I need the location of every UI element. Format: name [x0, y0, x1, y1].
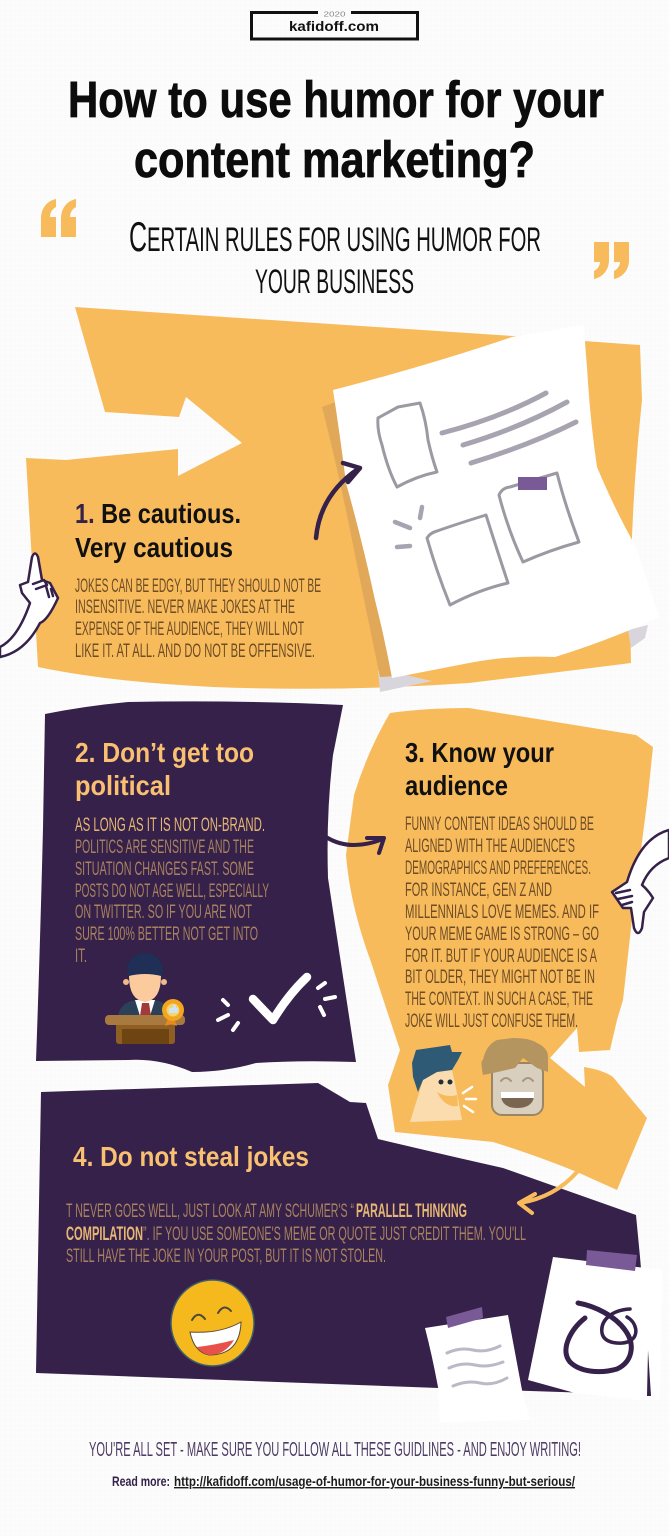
body text 3: FOR INSTANCE, GEN Z AND — [405, 879, 552, 901]
heading 4: 4. Do not steal jokes — [73, 1141, 309, 1172]
body text 2: POLITICS ARE SENSITIVE AND THE — [75, 836, 254, 858]
panel 3 background — [346, 708, 653, 1190]
icon: closing quote mark — [594, 242, 629, 279]
heading 1 — [75, 498, 241, 563]
icon: laughing emoji — [171, 1280, 254, 1366]
panel: rule 4 do not steal jokes — [36, 1083, 651, 1395]
body text 3 — [405, 813, 599, 1032]
subtitle: YOUR BUSINESS — [255, 263, 414, 301]
body text 1: JOKES CAN BE EDGY, BUT THEY SHOULD NOT BE — [75, 575, 321, 597]
logo badge: 2020 — [324, 12, 346, 18]
panel 1 background — [26, 307, 642, 689]
body text 4: PARALLEL THINKING — [356, 1200, 467, 1222]
icon: laughing face — [482, 1038, 548, 1115]
panel 2 background — [36, 701, 356, 1072]
heading 2: 2. Don’t get too — [75, 737, 254, 768]
paper sheet — [333, 325, 659, 678]
heading 3 — [405, 737, 554, 801]
panel: rule 2 don't get too political — [36, 701, 356, 1072]
body text 4: T NEVER GOES WELL, JUST LOOK AT AMY SCHUMER'S “ — [66, 1200, 354, 1222]
sketch frame 1 — [378, 403, 437, 487]
body text 2: POSTS DO NOT AGE WELL, ESPECIALLY — [75, 880, 269, 902]
sticky note with lines — [425, 1307, 530, 1422]
sketch frame 3 — [427, 515, 508, 605]
panel: rule 3 know your audience — [346, 708, 653, 1190]
body text 1: INSENSITIVE. NEVER MAKE JOKES AT THE — [75, 596, 295, 618]
scribble — [566, 1303, 636, 1372]
sketch text lines — [442, 393, 576, 463]
logo badge — [252, 12, 418, 39]
body text 1: EXPENSE OF THE AUDIENCE, THEY WILL NOT — [75, 618, 304, 640]
paper gray shadow right — [628, 625, 648, 648]
body text 2: AS LONG AS IT IS NOT ON-BRAND. — [75, 814, 265, 836]
icon: pointing hand down — [612, 830, 669, 933]
body text 4: COMPILATION — [66, 1223, 143, 1245]
icon: check mark with burst — [218, 977, 335, 1030]
paper orange shadow — [322, 398, 396, 677]
read more link: http://kafidoff.com/usage-of-humor-for-your-business-funny-but-serious/ — [174, 1473, 575, 1489]
sketch frame 2 — [499, 473, 579, 562]
heading 3: audience — [405, 770, 508, 801]
body text 2 — [75, 814, 269, 967]
body text 2: IT. — [75, 945, 87, 967]
body text 4: STILL HAVE THE JOKE IN YOUR POST, BUT IT IS NOT STOLEN. — [66, 1245, 386, 1267]
icon: speaker at podium — [105, 953, 185, 1044]
panel 4 background — [36, 1083, 651, 1395]
body text 2: SITUATION CHANGES FAST. SOME — [75, 858, 254, 880]
icon: opening quote mark — [41, 199, 76, 237]
heading 2: political — [75, 770, 171, 801]
arrow from rule 3 to rule 4 — [519, 1172, 577, 1213]
heading 2 — [75, 737, 254, 801]
heading 1: 1. Be cautious. — [75, 498, 241, 529]
tape — [518, 477, 547, 490]
arrow to paper — [316, 463, 360, 538]
heading 3: 3. Know your — [405, 737, 554, 768]
icon: pointing hand up — [0, 554, 58, 657]
body text 1 — [75, 575, 321, 662]
sketch burst marks — [395, 507, 422, 547]
panel: rule 1 be cautious — [26, 307, 659, 692]
title: content marketing? — [134, 131, 535, 188]
heading 1: Very cautious — [75, 532, 233, 563]
read more link: Read more: — [112, 1473, 170, 1489]
paper gray shadow left — [378, 670, 432, 692]
sticky note with scribble — [528, 1250, 662, 1400]
arrow from rule 2 to rule 3 — [326, 837, 384, 853]
body text 4 — [66, 1200, 526, 1267]
subtitle — [129, 213, 541, 301]
logo badge: kafidoff.com — [289, 18, 379, 34]
icon: talking man — [410, 1045, 476, 1122]
body text 1: LIKE IT. AT ALL. AND DO NOT BE OFFENSIVE. — [75, 640, 315, 662]
body text 2: ON TWITTER. SO IF YOU ARE NOT — [75, 901, 252, 923]
body text 2: SURE 100% BETTER NOT GET INTO — [75, 923, 258, 945]
title — [68, 71, 604, 188]
